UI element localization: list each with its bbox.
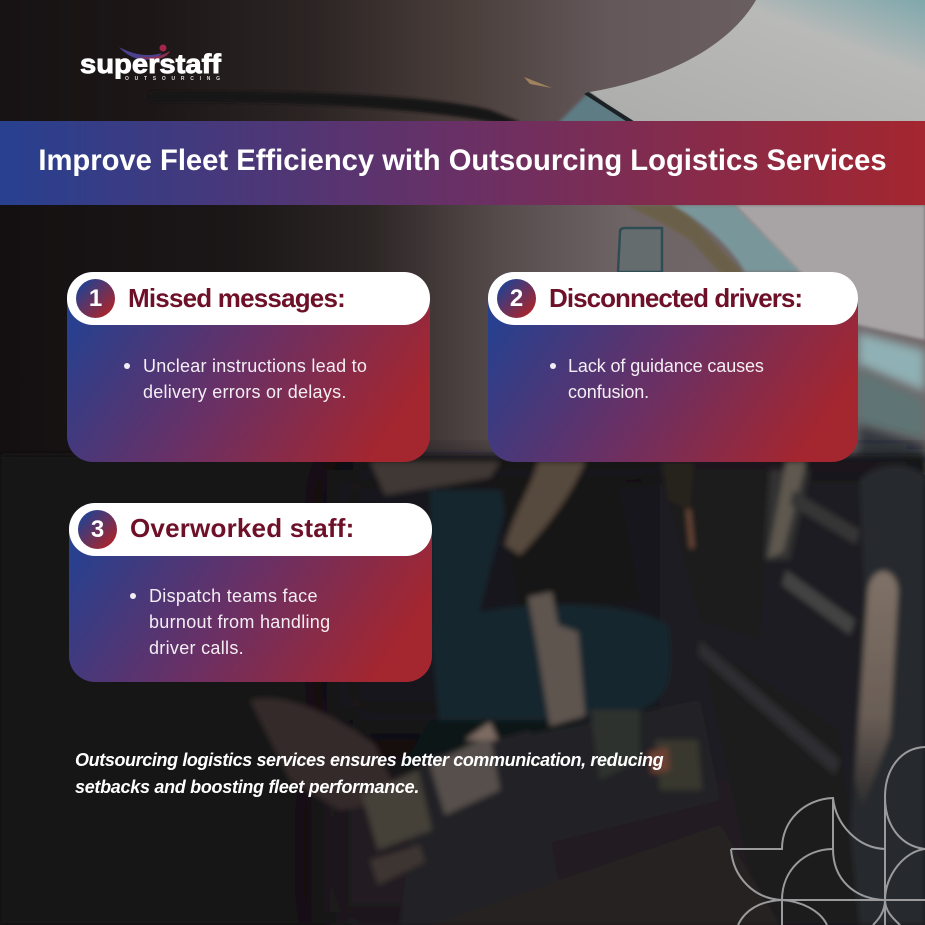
- logo: superstaff outsourcing: OUTSOURCING: [125, 76, 220, 82]
- upper cab: [0, 0, 925, 125]
- bullet text: Dispatch teams face: [149, 586, 318, 606]
- title banner: [0, 121, 925, 205]
- closing statement: setbacks and boosting fleet performance.: [75, 777, 419, 797]
- icon: number 1: 1: [89, 285, 102, 312]
- bullet text: Lack of guidance causes: [568, 356, 764, 376]
- bullet text: Unclear instructions lead to: [143, 356, 367, 376]
- closing statement: Outsourcing logistics services ensures better communication, reducing: [75, 750, 663, 770]
- icon: number 3: 3: [91, 516, 104, 543]
- heading: disconnected drivers: Disconnected drivers:: [549, 283, 802, 313]
- bullet text: [124, 356, 367, 402]
- bullet text: [550, 356, 764, 402]
- heading: overworked staff: Overworked staff:: [130, 513, 354, 543]
- closing statement: [75, 750, 664, 797]
- logo: superstaff outsourcing: superstaff: [80, 49, 222, 79]
- heading: missed messages: Missed messages:: [128, 283, 345, 313]
- title banner: Improve Fleet Efficiency with Outsourcing Logistics Services: [38, 145, 887, 177]
- panel: disconnected drivers: [488, 272, 858, 462]
- bullet text: burnout from handling: [149, 612, 330, 632]
- icon: number 2: [497, 279, 536, 318]
- middle cab: [0, 205, 925, 475]
- bullet text: delivery errors or delays.: [143, 382, 347, 402]
- panel: missed messages: [67, 272, 430, 462]
- bullet text: [130, 586, 330, 658]
- icon: number 3: [78, 510, 117, 549]
- panel: overworked staff: [69, 503, 432, 682]
- bullet text: confusion.: [568, 382, 649, 402]
- bullet text: driver calls.: [149, 638, 244, 658]
- lower cab: [0, 455, 925, 925]
- icon: number 2: 2: [510, 285, 523, 312]
- icon: number 1: [76, 279, 115, 318]
